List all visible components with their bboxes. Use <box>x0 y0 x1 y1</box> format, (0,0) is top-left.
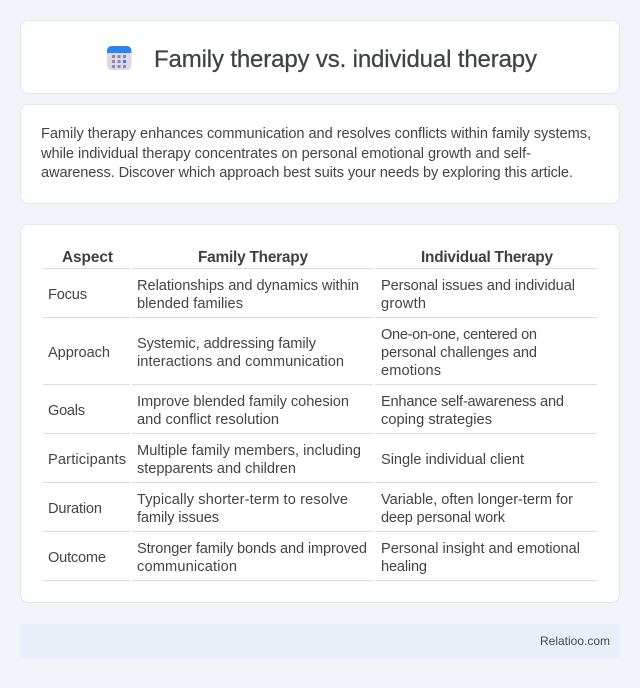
table header: Individual Therapy <box>421 249 553 266</box>
row: Outcome: communication <box>137 559 237 575</box>
row: Approach: emotions <box>381 363 441 379</box>
row: Duration: deep personal work <box>381 510 506 526</box>
row: Duration: Duration <box>48 501 102 517</box>
table header: Aspect <box>62 249 113 266</box>
row: Outcome: Personal insight and emotional <box>381 541 580 557</box>
row: Goals: coping strategies <box>381 412 492 428</box>
table header <box>43 249 597 268</box>
row: Goals: Improve blended family cohesion <box>137 394 349 410</box>
row: Goals: Enhance self-awareness and <box>381 394 564 410</box>
panel: title card <box>20 20 620 94</box>
row: Focus: Relationships and dynamics within <box>137 278 359 294</box>
row: Approach: interactions and communication <box>137 354 344 370</box>
row: Focus: growth <box>381 296 426 312</box>
row: Goals: and conflict resolution <box>137 412 279 428</box>
row: Outcome: healing <box>381 559 427 575</box>
row: Duration: Variable, often longer-term for <box>381 492 573 508</box>
intro text <box>40 126 591 181</box>
title: Family therapy vs. individual therapy <box>154 46 537 73</box>
row: Duration: Typically shorter-term to resolve <box>137 492 348 508</box>
intro text: while individual therapy concentrates on personal emotional growth and self- <box>40 146 531 162</box>
row: Goals: Goals <box>48 403 85 419</box>
row: Participants: Single individual client <box>381 452 524 468</box>
intro text: awareness. Discover which approach best suits your needs by exploring this article. <box>41 165 573 181</box>
intro text: Family therapy enhances communication and resolves conflicts within family systems, <box>41 126 591 142</box>
row: Focus: Personal issues and individual <box>381 278 575 294</box>
row: Approach: personal challenges and <box>381 345 537 361</box>
row: Approach: One-on-one, centered on <box>381 327 537 343</box>
panel: introduction <box>20 104 620 204</box>
row: Focus <box>43 278 597 318</box>
row: Approach: Systemic, addressing family <box>137 336 317 352</box>
panel: comparison table <box>20 224 620 602</box>
row: Participants: Participants <box>48 452 126 468</box>
icon: calendar <box>107 46 132 70</box>
row: Outcome <box>43 541 597 580</box>
row: Participants: stepparents and children <box>137 461 296 477</box>
row: Approach: Approach <box>48 345 110 361</box>
footer bar <box>20 624 620 658</box>
row: Outcome: Stronger family bonds and improved <box>137 541 367 557</box>
row: Approach <box>43 327 597 384</box>
table header: Family Therapy <box>198 249 308 266</box>
row: Focus: Focus <box>48 287 87 303</box>
row: Goals <box>43 394 597 434</box>
row: Duration: family issues <box>137 510 219 526</box>
footer credit: Relatioo.com <box>540 634 610 648</box>
row: Participants <box>43 443 597 482</box>
row: Outcome: Outcome <box>48 550 106 566</box>
row: Participants: Multiple family members, including <box>137 443 361 459</box>
row: Duration <box>43 492 597 532</box>
row: Focus: blended families <box>137 296 243 312</box>
